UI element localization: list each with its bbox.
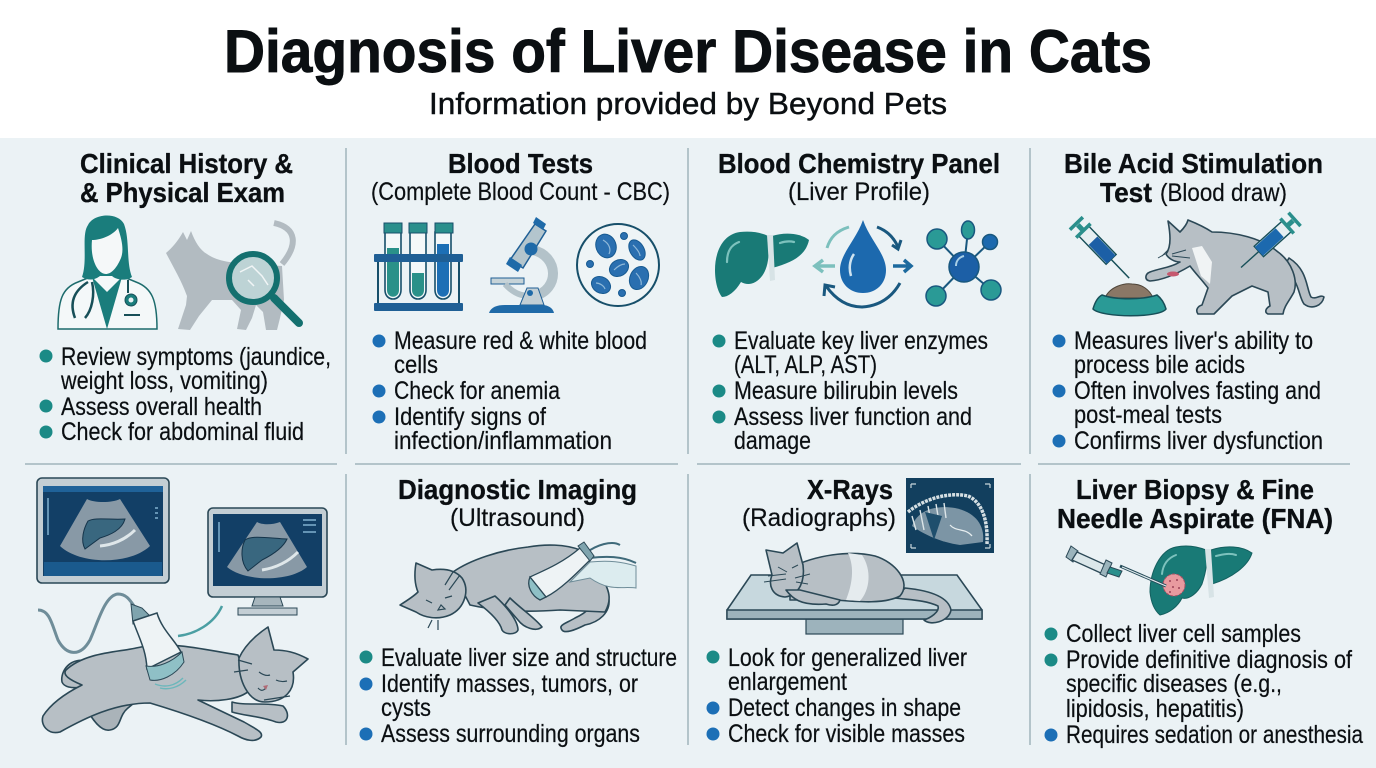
bullet list: x-rays: enlargement [728, 668, 847, 696]
bullet list: blood chemistry: Measure bilirubin levels [734, 377, 958, 405]
bullet list: biopsy [1044, 620, 1363, 749]
icon: blood drop with arrows [815, 220, 911, 307]
icon: ultrasound monitor right [208, 508, 327, 615]
panel: liver biopsy and FNA [1034, 474, 1368, 749]
icon: biopsy syringe [1066, 546, 1166, 586]
heading: blood tests: (Complete Blood Count - CBC) [371, 178, 670, 206]
bullet list: biopsy: lipidosis, hepatitis) [1066, 695, 1244, 723]
panel: blood tests [350, 146, 684, 456]
heading: blood tests [371, 148, 670, 206]
bullet list: diagnostic imaging: Assess surrounding organs [381, 720, 640, 748]
icon: cat receiving ultrasound [400, 542, 636, 634]
heading: blood chemistry [718, 148, 1000, 206]
icon: radiograph [906, 478, 994, 553]
icon: food bowl [1093, 284, 1166, 316]
bullet list: x-rays: Check for visible masses [728, 720, 965, 748]
bullet list: diagnostic imaging [360, 644, 677, 748]
heading: diagnostic imaging: (Ultrasound) [450, 504, 585, 532]
icon: molecule [926, 221, 1001, 306]
bullet list: x-rays [706, 644, 967, 748]
icon: syringe right [1234, 212, 1301, 275]
bullet list: biopsy: specific diseases (e.g., [1066, 670, 1282, 698]
bullet list: blood chemistry: Evaluate key liver enzymes [734, 327, 988, 355]
panel: ultrasound illustration [30, 474, 334, 746]
bullet list: blood tests: Identify signs of [394, 403, 546, 431]
heading: blood chemistry: (Liver Profile) [788, 178, 930, 206]
heading: clinical history: & Physical Exam [80, 177, 285, 208]
heading: diagnostic imaging: Diagnostic Imaging [398, 474, 637, 505]
bullet list: clinical history [40, 343, 331, 446]
panel: x-rays [692, 474, 1026, 748]
bullet list: bile acid: post-meal tests [1074, 401, 1222, 429]
heading: bile acid: Bile Acid Stimulation [1064, 148, 1323, 179]
bullet list: clinical history: Review symptoms (jaundice, [61, 343, 331, 371]
bullet list: clinical history: weight loss, vomiting) [60, 367, 268, 395]
bullet list: blood tests: Measure red & white blood [394, 327, 647, 355]
panel: diagnostic imaging [350, 474, 684, 748]
bullet list: biopsy: Collect liver cell samples [1066, 620, 1301, 648]
heading: x-rays: X-Rays [807, 474, 893, 505]
bullet list: bile acid: process bile acids [1074, 351, 1245, 379]
heading: clinical history: Clinical History & [80, 148, 293, 179]
heading: clinical history [80, 148, 293, 208]
icon: microscope [489, 217, 554, 313]
bullet list: blood tests [372, 327, 647, 455]
bullet list: blood tests: infection/inflammation [394, 427, 612, 455]
bullet list: bile acid [1052, 327, 1323, 455]
bullet list: bile acid: Often involves fasting and [1074, 377, 1321, 405]
bullet list: diagnostic imaging: Identify masses, tumors, or [381, 670, 638, 698]
heading: bile acid: Test [1100, 177, 1152, 208]
subtitle: Information provided by Beyond Pets [429, 86, 947, 121]
bullet list: clinical history: Check for abdominal fluid [61, 418, 304, 446]
icon: syringe left [1069, 216, 1136, 285]
bullet list: blood chemistry: Assess liver function and [734, 403, 972, 431]
icon: veterinarian [58, 215, 157, 329]
heading: blood chemistry: Blood Chemistry Panel [718, 148, 1000, 179]
icon: x-ray table [727, 575, 982, 634]
heading: biopsy: Liver Biopsy & Fine [1076, 474, 1314, 505]
icon: blood cells [577, 224, 659, 306]
heading: blood tests: Blood Tests [448, 148, 593, 179]
icon: liver [715, 232, 809, 297]
bullet list: diagnostic imaging: Evaluate liver size and structure [381, 644, 677, 672]
icon: cat under magnifying glass [166, 223, 299, 330]
heading: x-rays [742, 474, 896, 532]
bullet list: diagnostic imaging: cysts [381, 694, 431, 722]
bullet list: blood tests: cells [394, 351, 438, 379]
title: Diagnosis of Liver Disease in Cats [224, 18, 1152, 85]
icon: test tubes in rack [374, 223, 463, 311]
bullet list: blood chemistry: damage [734, 427, 811, 455]
heading: bile acid: (Blood draw) [1160, 179, 1287, 207]
heading: biopsy: Needle Aspirate (FNA) [1057, 503, 1333, 534]
icon: sleeping cat with probe [38, 594, 308, 740]
bullet list: blood tests: Check for anemia [394, 377, 560, 405]
panel: bile acid stimulation test [1034, 146, 1356, 456]
bullet list: blood chemistry [712, 327, 988, 455]
heading: x-rays: (Radiographs) [742, 504, 896, 532]
bullet list: clinical history: Assess overall health [61, 393, 262, 421]
heading: biopsy [1057, 474, 1333, 534]
bullet list: x-rays: Detect changes in shape [728, 694, 961, 722]
bullet list: x-rays: Look for generalized liver [728, 644, 967, 672]
panel: blood chemistry panel [692, 146, 1026, 456]
panel: clinical history and physical exam [20, 146, 342, 456]
icon: cat on table [764, 543, 951, 623]
bullet list: bile acid: Measures liver's ability to [1074, 327, 1313, 355]
heading: bile acid [1064, 148, 1323, 208]
bullet list: bile acid: Confirms liver dysfunction [1074, 427, 1323, 455]
bullet list: blood chemistry: (ALT, ALP, AST) [734, 351, 877, 379]
icon: ultrasound monitor left [37, 478, 169, 583]
icon: cat at food bowl [1146, 220, 1324, 314]
icon: liver with sample [1150, 546, 1252, 615]
heading: diagnostic imaging [398, 474, 637, 532]
